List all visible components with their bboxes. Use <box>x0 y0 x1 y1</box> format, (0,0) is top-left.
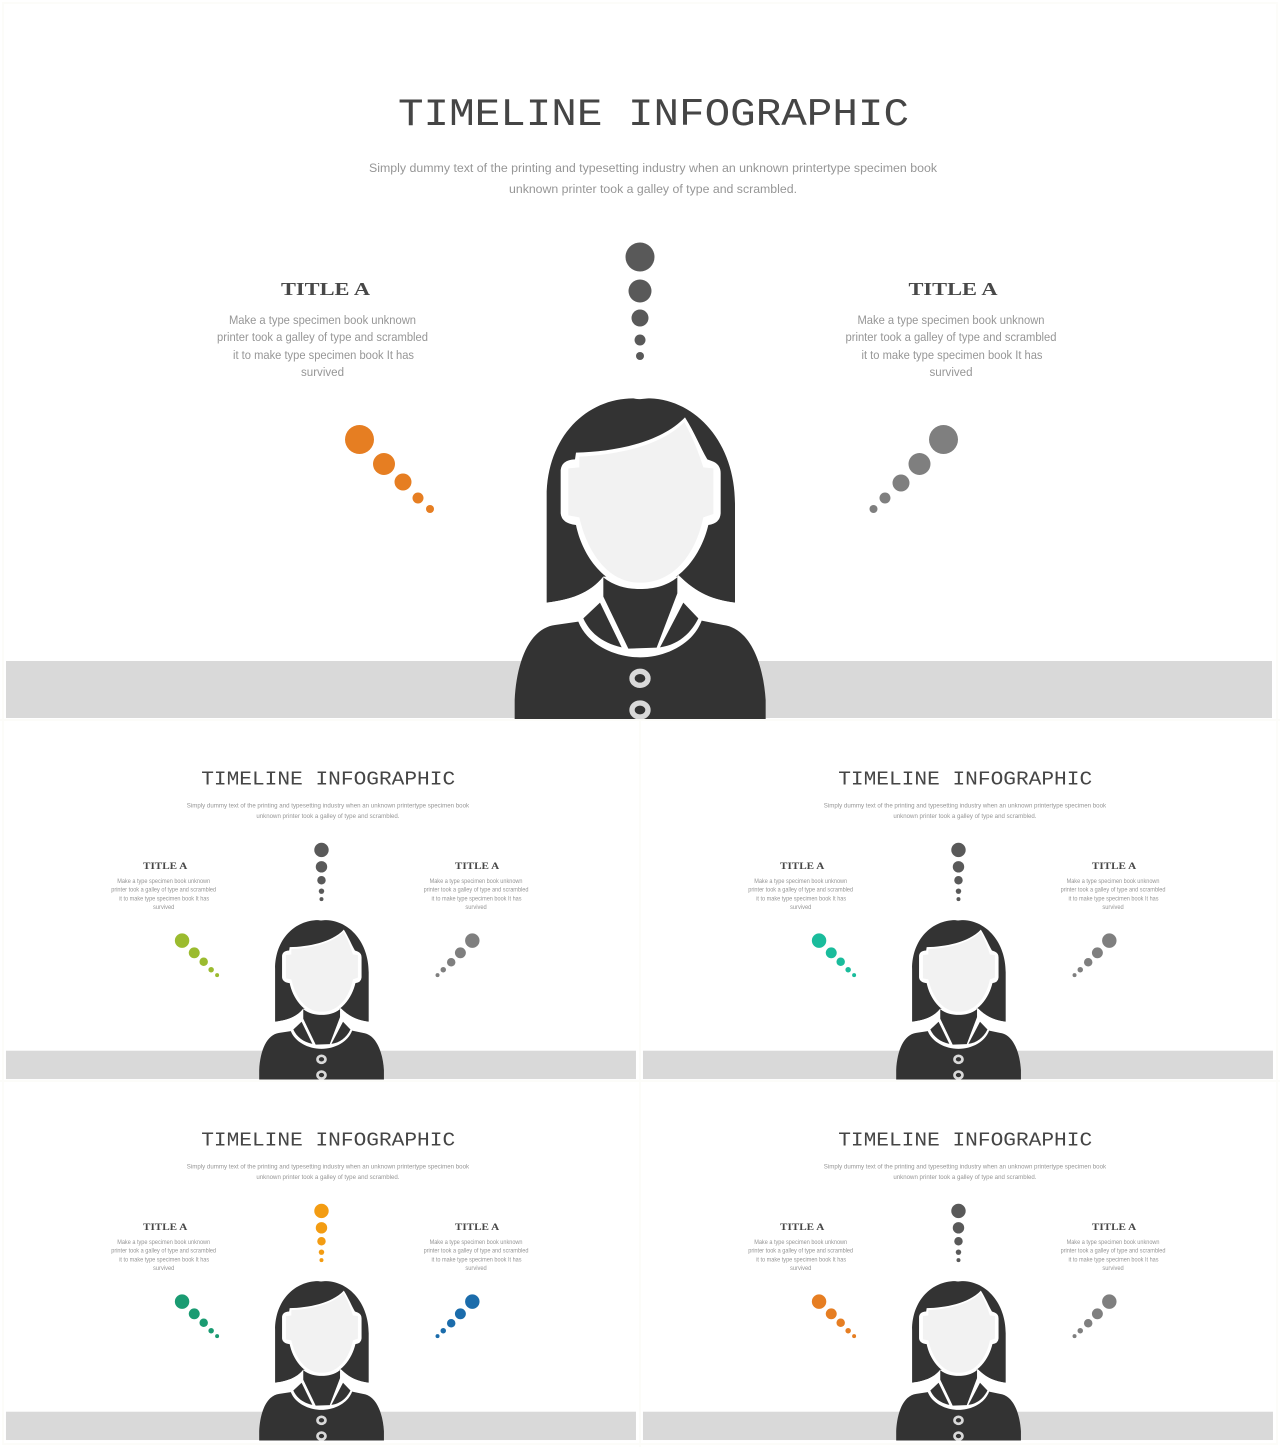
subtitle <box>187 803 470 820</box>
right text block: printer took a galley of type and scrambled <box>424 1248 529 1255</box>
title: TIMELINE INFOGRAPHIC <box>201 768 455 790</box>
subtitle: unknown printer took a galley of type and scrambled. <box>893 1174 1037 1181</box>
left text block: Make a type specimen book unknown <box>754 1239 848 1246</box>
subtitle: Simply dummy text of the printing and typesetting industry when an unknown printertype specimen book <box>187 803 470 810</box>
slide: small teal variant <box>643 768 1273 1080</box>
top dots <box>951 843 966 901</box>
left dots <box>175 1294 219 1338</box>
right dots <box>1073 933 1117 977</box>
right dots <box>436 933 480 977</box>
gray floor band <box>6 1412 636 1440</box>
right text block <box>1061 878 1166 911</box>
left text block: printer took a galley of type and scrambled <box>111 887 217 894</box>
left text block: it to make type specimen book It has <box>119 1257 209 1264</box>
left text block <box>748 878 854 911</box>
gray floor band <box>643 1412 1273 1440</box>
left text block: Make a type specimen book unknown <box>754 878 848 885</box>
subtitle: unknown printer took a galley of type and scrambled. <box>256 1174 400 1181</box>
left text block: Make a type specimen book unknown <box>117 1239 211 1246</box>
subtitle <box>824 803 1107 820</box>
left text block <box>111 1239 217 1272</box>
left text block: Make a type specimen book unknown <box>117 878 211 885</box>
right text block: it to make type specimen book It has <box>1069 1257 1159 1264</box>
top dots <box>314 843 329 901</box>
left text block <box>748 1239 854 1272</box>
right heading: TITLE A <box>455 861 500 871</box>
right text block: it to make type specimen book It has <box>432 896 522 903</box>
right heading: TITLE A <box>908 279 998 299</box>
left heading: TITLE A <box>143 861 188 871</box>
right heading: TITLE A <box>1092 1222 1137 1232</box>
right text block: it to make type specimen book It has <box>862 348 1042 362</box>
left text block: printer took a galley of type and scrambled <box>748 887 854 894</box>
right text block <box>846 313 1057 379</box>
icon: woman figure <box>515 398 766 719</box>
subtitle: Simply dummy text of the printing and typesetting industry when an unknown printertype specimen book <box>187 1164 470 1171</box>
subtitle: Simply dummy text of the printing and typesetting industry when an unknown printertype specimen book <box>824 803 1107 810</box>
left heading: TITLE A <box>780 861 825 871</box>
left text block: printer took a galley of type and scrambled <box>111 1248 217 1255</box>
right text block: survived <box>1102 904 1124 911</box>
subtitle: unknown printer took a galley of type and scrambled. <box>509 182 797 196</box>
subtitle: Simply dummy text of the printing and typesetting industry when an unknown printertype specimen book <box>824 1164 1107 1171</box>
slide: large main slide <box>6 93 1272 719</box>
gray floor band <box>6 661 1272 718</box>
slide: small multicolor variant <box>6 1129 636 1441</box>
right text block: survived <box>465 1265 487 1272</box>
left heading: TITLE A <box>143 1222 188 1232</box>
left text block: survived <box>790 1265 812 1272</box>
left text block: it to make type specimen book It has <box>119 896 209 903</box>
right dots <box>436 1294 480 1338</box>
icon: woman figure <box>259 920 384 1080</box>
title: TIMELINE INFOGRAPHIC <box>201 1129 455 1151</box>
right text block: survived <box>1102 1265 1124 1272</box>
left text block: survived <box>301 365 344 379</box>
icon: woman figure <box>896 920 1021 1080</box>
right text block: Make a type specimen book unknown <box>858 313 1045 327</box>
left dots <box>812 1294 856 1338</box>
right text block: Make a type specimen book unknown <box>430 1239 523 1246</box>
subtitle: Simply dummy text of the printing and typesetting industry when an unknown printertype specimen book <box>369 161 938 175</box>
left text block <box>111 878 217 911</box>
left heading: TITLE A <box>281 279 370 299</box>
right text block: it to make type specimen book It has <box>432 1257 522 1264</box>
left text block: Make a type specimen book unknown <box>229 313 416 327</box>
slide: small green variant <box>6 768 636 1080</box>
subtitle <box>187 1164 470 1181</box>
icon: woman figure <box>259 1281 384 1441</box>
left text block: survived <box>790 904 812 911</box>
left heading: TITLE A <box>780 1222 825 1232</box>
right text block: it to make type specimen book It has <box>1069 896 1159 903</box>
subtitle <box>369 161 938 196</box>
right text block <box>424 878 529 911</box>
left text block <box>217 313 428 379</box>
right text block: Make a type specimen book unknown <box>1067 878 1160 885</box>
right text block: Make a type specimen book unknown <box>1067 1239 1160 1246</box>
top dots <box>314 1204 329 1262</box>
title: TIMELINE INFOGRAPHIC <box>838 1129 1092 1151</box>
left dots <box>175 933 219 977</box>
left text block: it to make type specimen book It has <box>756 1257 846 1264</box>
right text block: printer took a galley of type and scrambled <box>846 330 1057 344</box>
right text block: survived <box>930 365 973 379</box>
title: TIMELINE INFOGRAPHIC <box>398 93 909 137</box>
left text block: printer took a galley of type and scrambled <box>748 1248 854 1255</box>
left text block: survived <box>153 1265 175 1272</box>
title: TIMELINE INFOGRAPHIC <box>838 768 1092 790</box>
gray floor band <box>6 1051 636 1079</box>
top dots <box>951 1204 966 1262</box>
gray floor band <box>643 1051 1273 1079</box>
right text block: survived <box>465 904 487 911</box>
left dots <box>345 425 434 513</box>
left text block: it to make type specimen book It has <box>233 348 414 362</box>
right heading: TITLE A <box>455 1222 500 1232</box>
right text block <box>1061 1239 1166 1272</box>
right dots <box>1073 1294 1117 1338</box>
right heading: TITLE A <box>1092 861 1137 871</box>
subtitle: unknown printer took a galley of type and scrambled. <box>893 813 1037 820</box>
subtitle: unknown printer took a galley of type and scrambled. <box>256 813 400 820</box>
right dots <box>870 425 958 513</box>
right text block: Make a type specimen book unknown <box>430 878 523 885</box>
top dots <box>626 242 654 360</box>
right text block: printer took a galley of type and scrambled <box>424 887 529 894</box>
right text block: printer took a galley of type and scrambled <box>1061 887 1166 894</box>
right text block <box>424 1239 529 1272</box>
left text block: it to make type specimen book It has <box>756 896 846 903</box>
left text block: survived <box>153 904 175 911</box>
subtitle <box>824 1164 1107 1181</box>
left text block: printer took a galley of type and scrambled <box>217 330 428 344</box>
left dots <box>812 933 856 977</box>
slide: small orange variant <box>643 1129 1273 1441</box>
icon: woman figure <box>896 1281 1021 1441</box>
right text block: printer took a galley of type and scrambled <box>1061 1248 1166 1255</box>
